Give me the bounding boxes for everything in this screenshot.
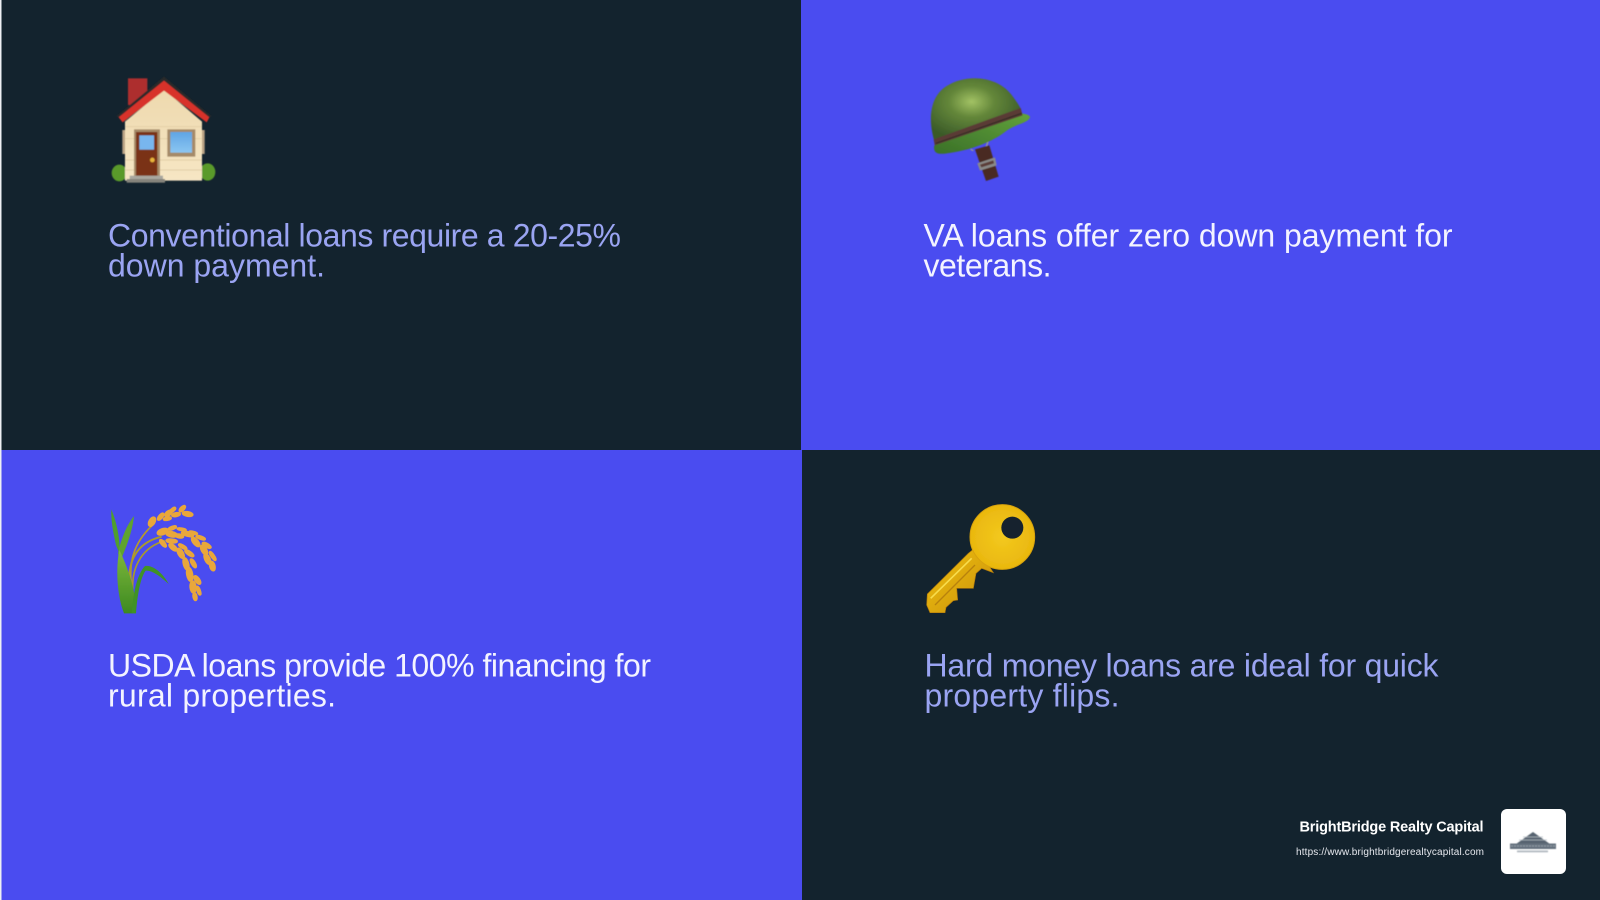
icon: rice <box>111 505 217 613</box>
icon: house <box>112 77 215 183</box>
brand url: https://www.brightbridgerealtycapital.com <box>1296 847 1484 858</box>
text: hard money loans: Hard money loans are ideal for quick <box>924 648 1440 684</box>
left edge strip <box>0 0 2 900</box>
text: conventional loans: Conventional loans require a 20-25% <box>108 218 621 254</box>
icon: key <box>927 505 1035 613</box>
icon: helmet <box>931 78 1030 181</box>
text: conventional loans: down payment. <box>108 248 325 284</box>
panel: VA loans <box>801 0 1600 450</box>
panel: hard money loans <box>802 450 1600 900</box>
logo <box>1501 809 1566 874</box>
brand block <box>1296 809 1566 874</box>
text: USDA loans: rural properties. <box>108 678 336 714</box>
text: hard money loans: property flips. <box>924 678 1120 714</box>
panel: USDA loans <box>0 450 802 900</box>
text: USDA loans: USDA loans provide 100% financing for <box>108 648 651 684</box>
brand name: BrightBridge Realty Capital <box>1300 820 1484 836</box>
panel: conventional loans <box>0 0 801 450</box>
text: VA loans: VA loans offer zero down payment for <box>924 218 1453 254</box>
text: VA loans: veterans. <box>924 248 1052 284</box>
